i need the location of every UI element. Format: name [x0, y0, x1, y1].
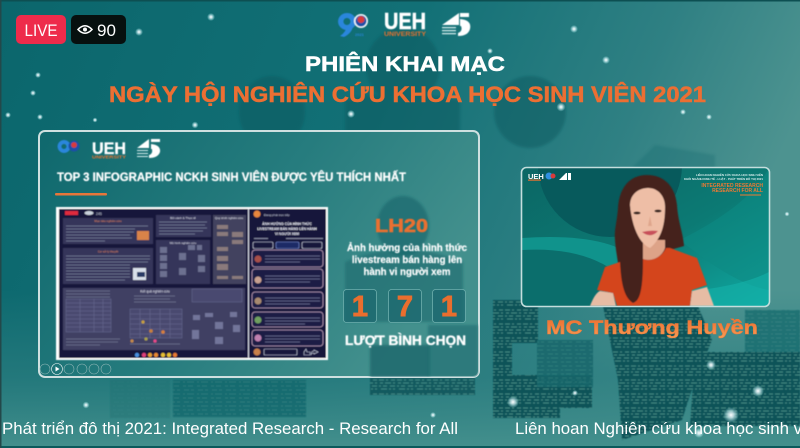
eyes and mouth [633, 210, 662, 235]
thumbnail: context panel [156, 215, 211, 237]
infographic thumbnail: 245 [96, 212, 102, 216]
LIVE badge: LIVE [24, 21, 58, 40]
vote count boxes: 1 [352, 291, 368, 323]
video headline [684, 172, 763, 196]
slide silhouettes and city [345, 196, 478, 377]
video headline: INTEGRATED RESEARCH [701, 183, 763, 189]
logo: 90 years youth emblem: 2021 [355, 32, 365, 37]
infographic thumbnail [56, 207, 328, 360]
slide logos [58, 139, 160, 160]
thumbnail: live stream sidebar: ẢNH HƯỞNG CỦA HÌNH THỨC [262, 221, 312, 226]
panel: MC video [520, 166, 770, 308]
thumbnail: research process panel [213, 215, 246, 284]
video headline: KHỐI NGÀNH KINH TẾ - LUẬT - PHÁT TRIỂN ĐÔ THỊ 2021 [684, 176, 763, 181]
thumbnail: reaction emoji row [135, 353, 177, 357]
panel: presentation slide [39, 131, 479, 377]
project code LH20: LH20 [375, 216, 428, 236]
ticker text [2, 419, 800, 438]
hair back [615, 175, 684, 303]
viewer count badge [71, 15, 126, 44]
video headline: LIÊN HOAN NGHIÊN CỨU KHOA HỌC SINH VIÊN [696, 172, 763, 177]
MC name: MC Thương Huyền [546, 317, 758, 339]
video logos [528, 172, 571, 181]
arms [590, 287, 714, 306]
ticker text: Liên hoan Nghiên cứu khoa học sinh v [515, 419, 800, 438]
vote count boxes: 1 [441, 291, 457, 323]
video headline: RESEARCH FOR ALL [712, 188, 763, 194]
slide logos: UNIVERSITY [92, 154, 126, 160]
thumbnail: research process panel: Quy trình nghiên cứu [215, 216, 243, 220]
logos header [338, 8, 470, 38]
thumbnail: live stream sidebar: VI NGƯỜI XEM [275, 231, 299, 236]
heading: opening session: PHIÊN KHAI MẠC [305, 52, 505, 76]
thumbnail: results panel [63, 288, 245, 350]
logo: UEH University: UEH [384, 8, 426, 34]
slide logos: UEH [92, 139, 126, 158]
thumbnail: divider [248, 209, 249, 358]
thumbnail: live stream sidebar: Đang phát trực tiếp [264, 213, 290, 217]
title [109, 52, 706, 107]
votes label: LƯỢT BÌNH CHỌN [345, 333, 466, 348]
thumbnail: live stream sidebar: LIVESTREAM BÁN HÀNG LÊN HÀNH [257, 226, 317, 231]
vote count boxes: 7 [397, 291, 413, 323]
logo: UEH University: UNIVERSITY [384, 31, 427, 38]
thumbnail: research objectives panel [63, 218, 153, 244]
thumbnail: results panel: Kết quả nghiên cứu [140, 290, 170, 294]
shirt [597, 248, 707, 306]
viewer count badge: 90 [97, 21, 116, 40]
video backdrop shapes [522, 168, 768, 306]
project title: Ảnh hưởng của hình thức [347, 242, 468, 254]
video logos: UEH [528, 172, 544, 181]
project title [347, 242, 468, 278]
vote count boxes [344, 290, 466, 323]
thumbnail: research model panel: Mô hình nghiên cứu [170, 241, 197, 245]
thumbnail: theory panel [63, 248, 153, 284]
background silhouettes of people [239, 28, 715, 175]
LIVE badge [16, 15, 66, 44]
logo: 45 years [442, 13, 470, 36]
presenter [590, 175, 714, 306]
neck [643, 240, 665, 260]
face [630, 188, 665, 248]
thumbnail: research model panel [156, 240, 210, 284]
slide playback toolbar [40, 364, 111, 374]
slide heading underline [55, 193, 107, 196]
sidebar comment cards [252, 250, 323, 346]
video frame border [522, 168, 770, 306]
project title: livestream bán hàng lên [352, 255, 462, 266]
ticker text: Phát triển đô thị 2021: Integrated Research - Research for All [2, 419, 458, 438]
thumbnail: theory panel: Cơ sở lý thuyết [98, 250, 118, 254]
thumbnail: context panel: Bối cảnh & Thực tế [170, 216, 196, 220]
thumbnail: live stream sidebar [252, 210, 323, 356]
thumbnail: research objectives panel: Mục tiêu nghiên cứu [94, 219, 122, 223]
background city skyline [110, 300, 800, 440]
project title: hành vi người xem [363, 267, 451, 278]
slide heading: TOP 3 INFOGRAPHIC NCKH SINH VIÊN ĐƯỢC YÊU THÍCH NHẤT [57, 169, 407, 184]
heading: event name: NGÀY HỘI NGHIÊN CỨU KHOA HỌC SINH VIÊN 2021 [109, 82, 706, 107]
